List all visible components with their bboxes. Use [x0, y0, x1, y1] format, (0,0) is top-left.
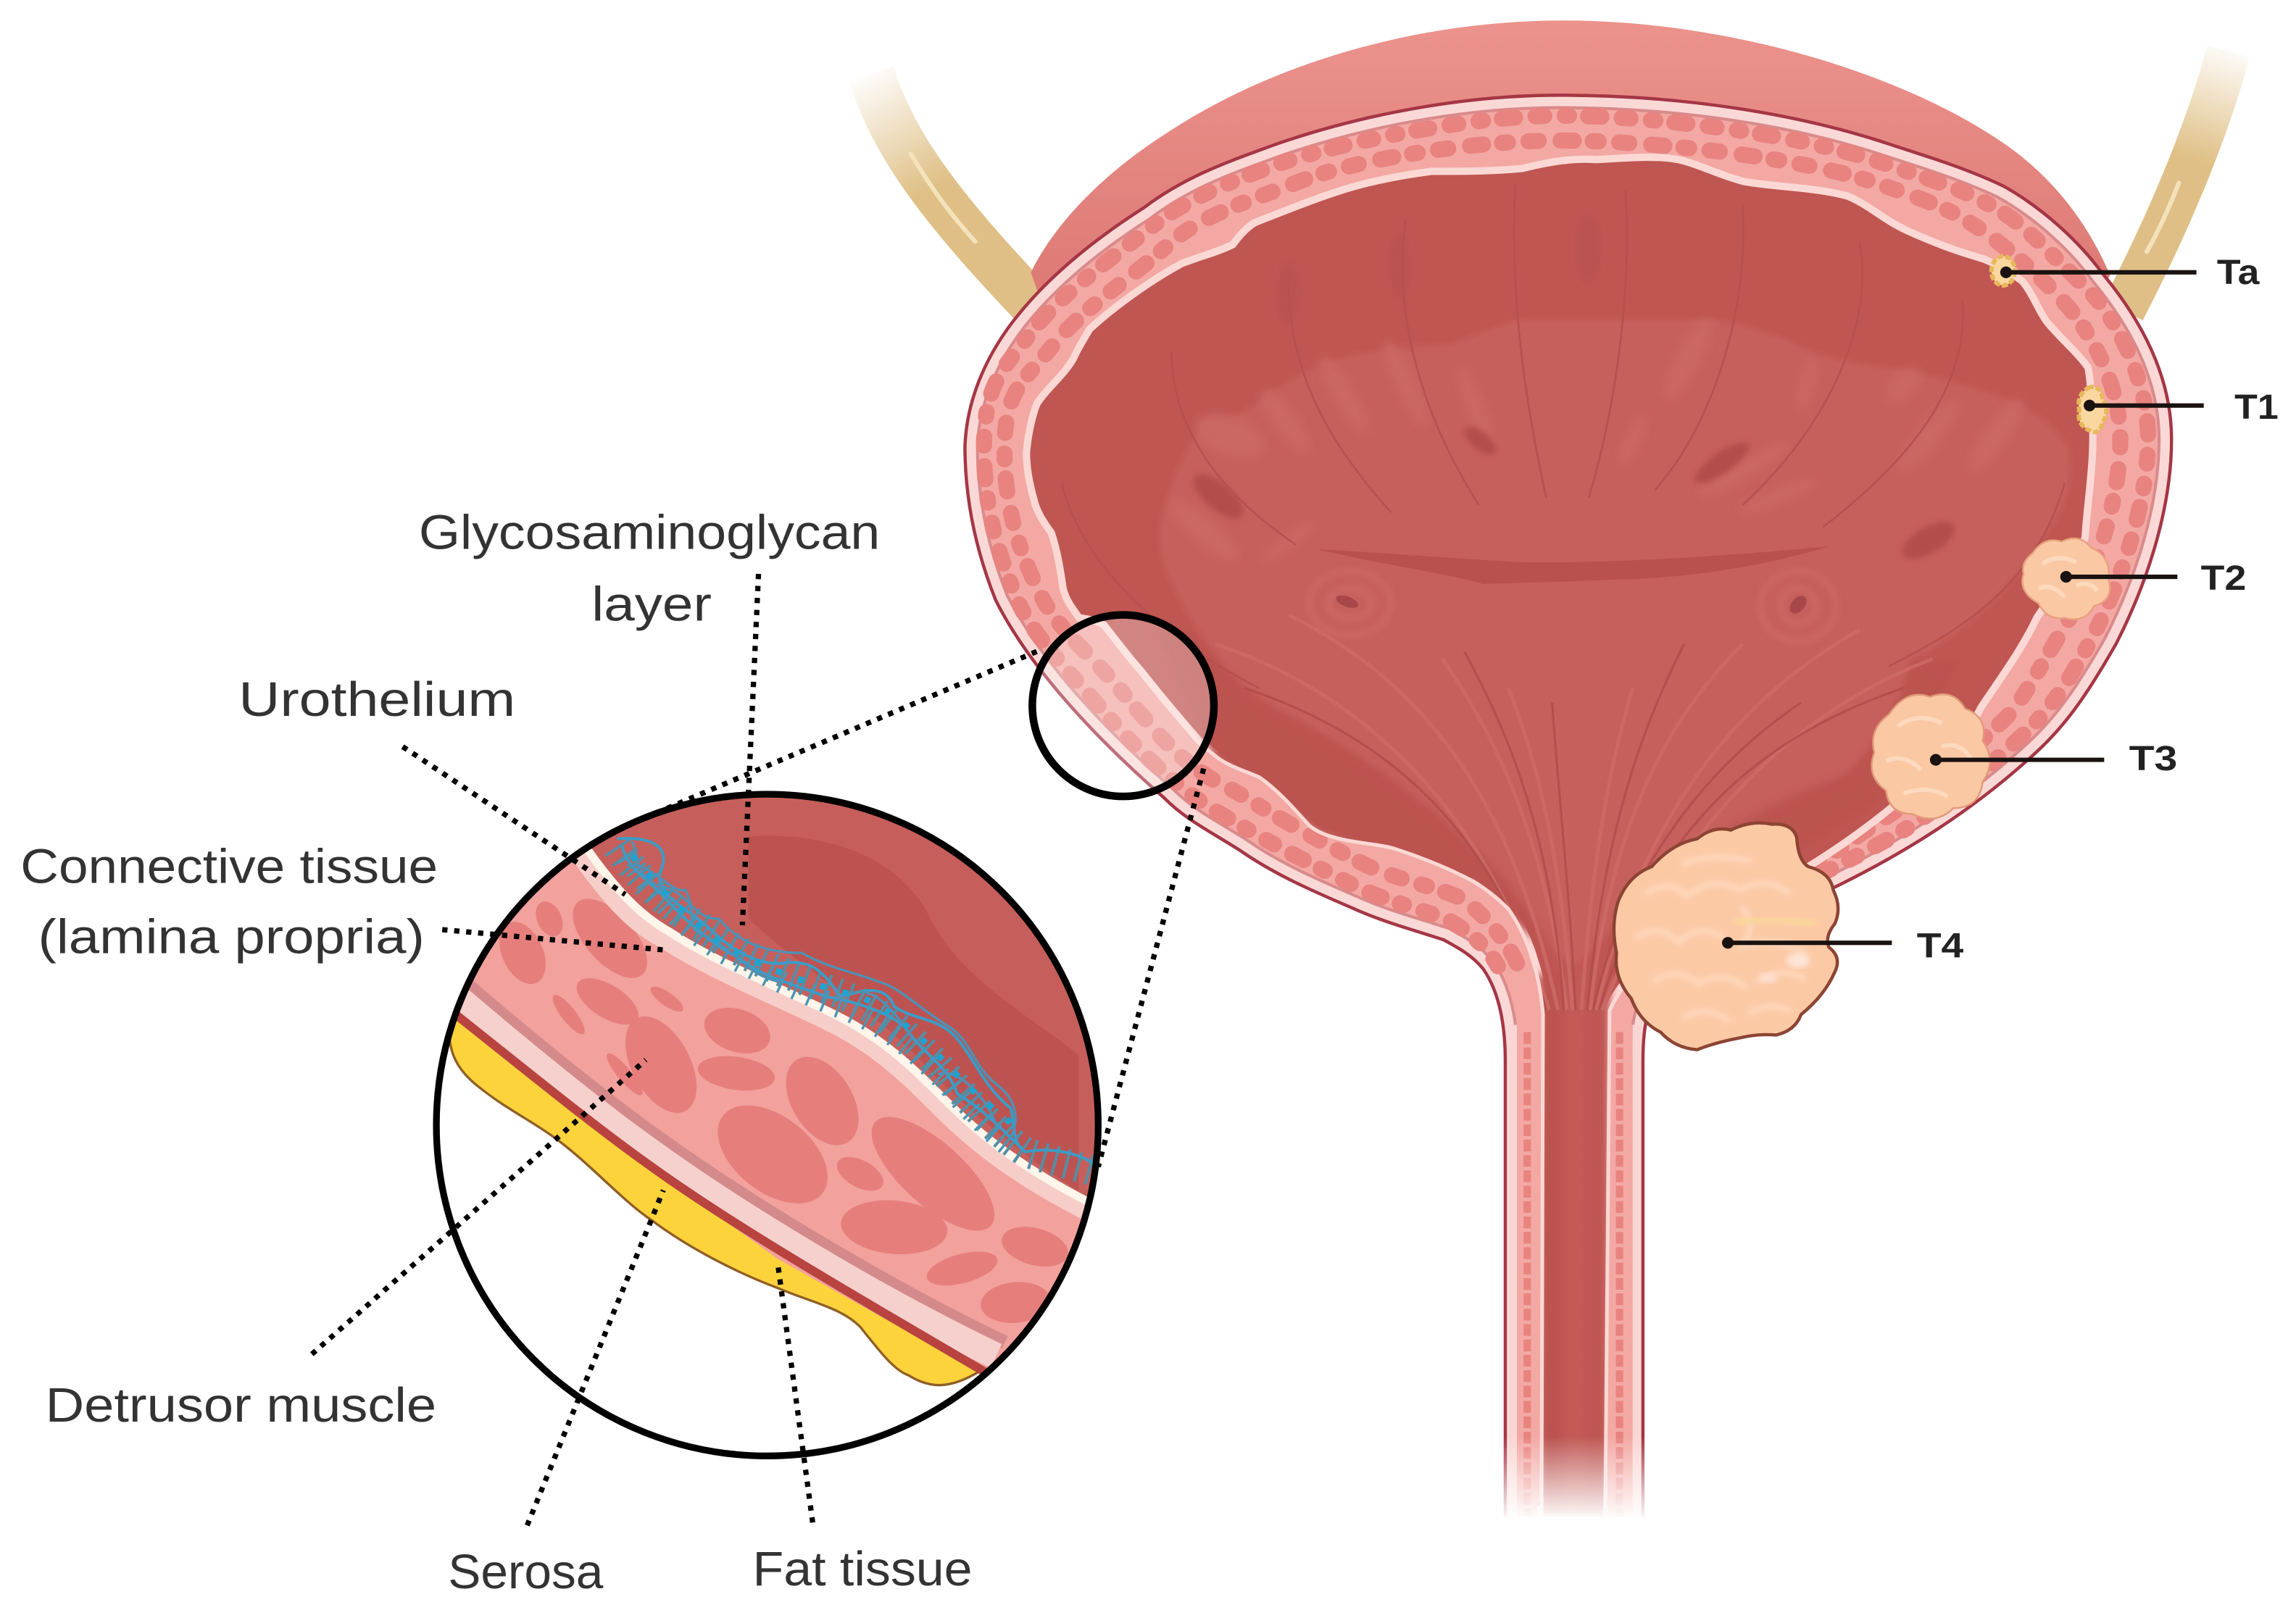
tumour T4	[1614, 823, 1838, 1050]
leader: Fat tissue	[778, 1262, 812, 1522]
stage label T1: T1	[2234, 388, 2279, 427]
leader: Serosa	[527, 1190, 663, 1525]
stage label Ta: Ta	[2217, 253, 2260, 292]
lighter fold region	[1160, 319, 2070, 966]
small magnifier circle	[1032, 615, 1214, 796]
right ureter	[2124, 51, 2229, 310]
neck lumen	[1537, 974, 1610, 1517]
fan folds to neck	[1215, 615, 1933, 1010]
dark pockets	[1186, 422, 1960, 567]
stage label Ta	[2000, 253, 2260, 292]
label: Glycosaminoglycan layer	[419, 506, 880, 632]
stage label T3	[1930, 739, 2177, 778]
bladder lumen	[1026, 157, 2093, 1517]
leader: Glycosaminoglycan	[742, 574, 759, 925]
fold lobes	[1195, 343, 2019, 436]
detrusor muscle tissue	[428, 841, 1157, 1390]
bladder back dome	[1031, 20, 2110, 380]
leader: Urothelium	[403, 746, 625, 894]
ridge arc	[1316, 546, 1831, 584]
urethra fade	[1491, 1436, 1659, 1521]
label: Connective tissue (lamina propria): (lamina propria)	[38, 910, 425, 964]
label: Connective tissue (lamina propria)	[20, 840, 438, 964]
muscle bundles	[490, 886, 1073, 1326]
label: Glycosaminoglycan layer: layer	[591, 578, 712, 632]
tumour T1	[2079, 387, 2106, 432]
label: Urothelium: Urothelium	[238, 673, 515, 727]
ureteric orifices	[1309, 571, 1837, 641]
stage label T3: T3	[2129, 739, 2177, 778]
urothelium	[583, 843, 1098, 1207]
faint dark pockets at the dome	[1277, 214, 1600, 325]
label: Connective tissue (lamina propria): Connective tissue	[20, 840, 438, 893]
lower dark flanks	[1196, 732, 1826, 945]
stage label T2: T2	[2201, 559, 2246, 598]
magnified wall section	[449, 797, 1095, 1387]
bladder with urethra	[965, 95, 2171, 1521]
leader: Detrusor muscle	[312, 1060, 646, 1354]
leader: Connective tissue	[442, 930, 666, 950]
large magnifier circle	[436, 794, 1098, 1456]
label: Fat tissue: Fat tissue	[752, 1543, 973, 1596]
tumour T3	[1871, 694, 1990, 819]
fat tissue	[450, 996, 1011, 1385]
label: Serosa: Serosa	[448, 1546, 604, 1599]
label: Glycosaminoglycan layer: Glycosaminoglycan	[419, 506, 880, 560]
label: Detrusor muscle: Detrusor muscle	[46, 1379, 436, 1433]
glycosaminoglycan network	[617, 838, 1103, 1174]
stage label T2	[2060, 559, 2246, 598]
dotted zoom lines	[630, 651, 1204, 1167]
lamina propria	[578, 854, 1093, 1215]
stage label T1	[2084, 388, 2279, 427]
muscle cells outer row	[984, 116, 2148, 966]
stage label T4	[1722, 926, 1963, 965]
fold lines	[1062, 183, 2065, 688]
left ureter	[871, 73, 1043, 314]
bladder wall	[965, 95, 2171, 1517]
stage label T4: T4	[1917, 926, 1963, 965]
lumen in magnified view	[583, 773, 1127, 1215]
muscle cells inner row	[1004, 141, 2121, 963]
urethra wall	[1508, 1025, 1640, 1517]
tumour T2	[2022, 538, 2110, 620]
tumour Ta	[1992, 257, 2015, 285]
lower layers: serosa	[454, 985, 1005, 1373]
